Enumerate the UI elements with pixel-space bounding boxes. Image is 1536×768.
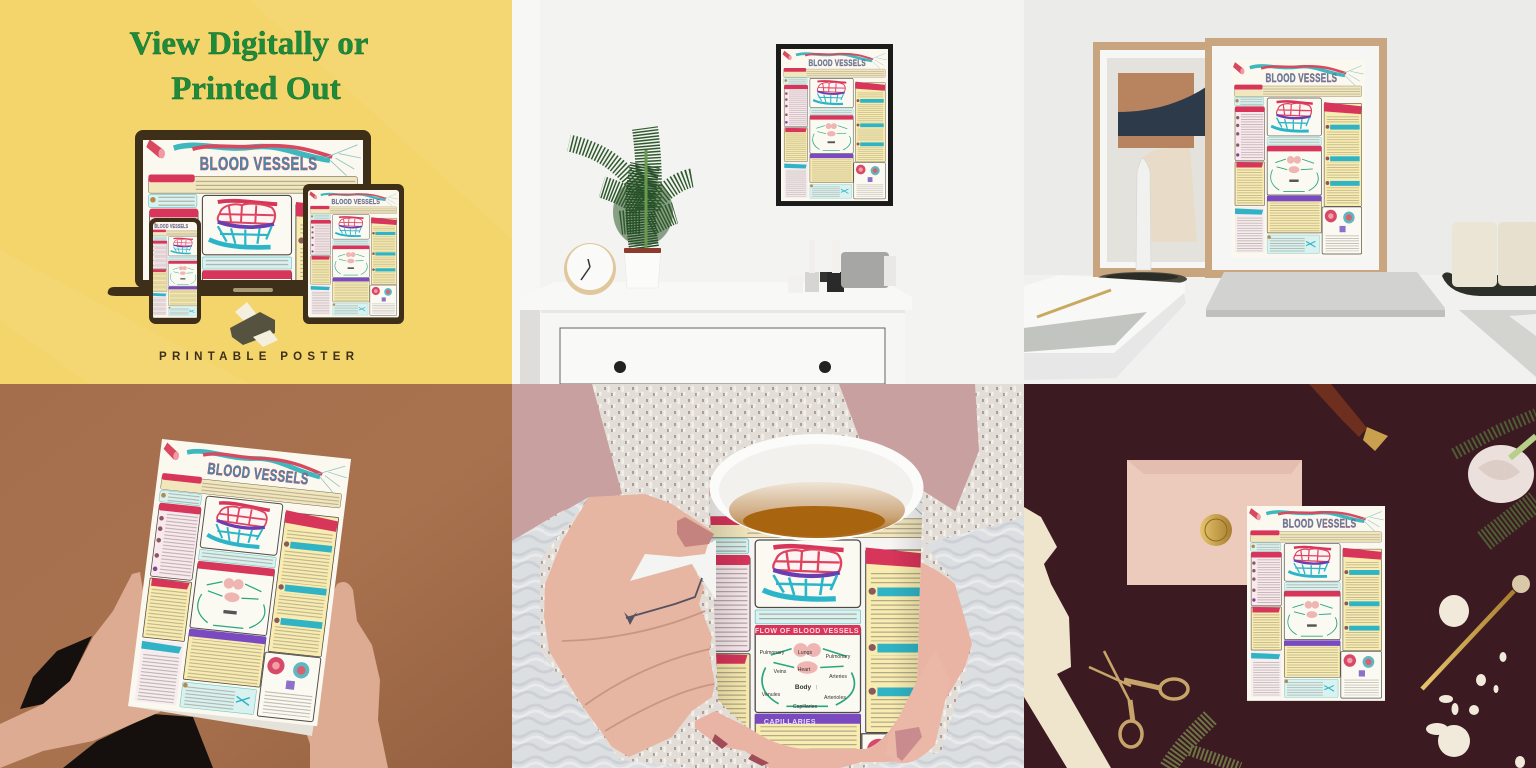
mug diagram labels: Veins: [774, 669, 787, 675]
mug diagram labels: Capillaries: [793, 704, 818, 710]
icon: printer: [230, 302, 278, 347]
mug diagram labels: Arteries: [829, 674, 847, 680]
front frame with poster: BLOOD VESSELS: [1265, 72, 1337, 85]
poster book: [128, 439, 351, 736]
tablet on desk: [1459, 310, 1536, 377]
panel: poster book held in hands: [0, 384, 512, 768]
laptop closed: [1206, 272, 1445, 317]
left hand: [544, 494, 715, 757]
candle: [1097, 158, 1187, 286]
gold pen: [1422, 575, 1530, 689]
mug diagram labels: Body: [795, 684, 812, 691]
label: printable poster: PRINTABLE POSTER: [159, 351, 355, 363]
phone mockup: [149, 218, 201, 324]
mug diagram labels: FLOW OF BLOOD VESSELS: [755, 628, 859, 635]
dark sleeve: [20, 636, 213, 768]
flowers: [1454, 414, 1536, 541]
dried sprig: [1168, 717, 1240, 768]
wax seal: [1200, 514, 1232, 546]
lower and right hand: [695, 561, 972, 768]
mug diagram labels: Venules: [762, 692, 781, 698]
sweater sleeves: [512, 497, 1024, 768]
panel: mug held in hands: [512, 384, 1024, 768]
poster print: BLOOD VESSELS: [1282, 518, 1356, 531]
cream ribbon: [1024, 507, 1111, 768]
pink hair: [512, 384, 979, 541]
laptop mockup: [108, 130, 371, 296]
panel: poster on desk: [1024, 0, 1536, 384]
panel: flat lay with envelope: [1024, 384, 1536, 768]
heading: view digitally or printed out: Printed Out: [171, 71, 341, 107]
gold scissors: [1089, 651, 1188, 747]
lower nails: [712, 734, 769, 766]
poster print: [1247, 506, 1385, 701]
panel: wall frame on dresser: [512, 0, 1024, 384]
candles on tray: [1442, 222, 1536, 296]
potted plant: [569, 128, 692, 288]
mug diagram labels: Arterioles: [824, 695, 846, 701]
heading: view digitally or printed out: View Digitally or: [130, 26, 368, 62]
envelope: [1127, 460, 1302, 585]
framed poster on wall: [776, 44, 893, 206]
poster book: BLOOD VESSELS: [206, 459, 310, 488]
mug diagram labels: Pulmonary: [760, 650, 785, 656]
desk items: [805, 252, 896, 292]
front frame with poster: [1205, 38, 1387, 278]
dresser: [520, 310, 905, 384]
left hand: [0, 572, 160, 768]
wax stamp: [1309, 384, 1388, 451]
framed poster on wall: BLOOD VESSELS: [809, 58, 866, 68]
mug diagram labels: Lungs: [798, 650, 812, 656]
mug: [709, 434, 924, 749]
panel: view digitally or printed: [0, 0, 512, 384]
tablet mockup: [303, 184, 404, 324]
petals: [1426, 595, 1525, 768]
back frame with abstract art: [1093, 42, 1209, 277]
phone mockup: BLOOD VESSELS: [154, 224, 188, 229]
mug diagram labels: Pulmonary: [826, 654, 851, 660]
thumb: [895, 681, 946, 764]
mug diagram labels: CAPILLARIES: [764, 719, 816, 726]
mug handle: [630, 540, 716, 600]
laptop mockup: BLOOD VESSELS: [200, 154, 317, 175]
desk clock: [564, 243, 616, 295]
tablet mockup: BLOOD VESSELS: [331, 198, 380, 206]
desk: [1024, 275, 1536, 384]
right hand: [300, 582, 388, 768]
heading: view digitally or printed out: [130, 30, 368, 100]
mug diagram labels: Heart: [798, 667, 811, 673]
notebook: [1024, 275, 1186, 380]
mug diagram labels: [755, 628, 859, 726]
